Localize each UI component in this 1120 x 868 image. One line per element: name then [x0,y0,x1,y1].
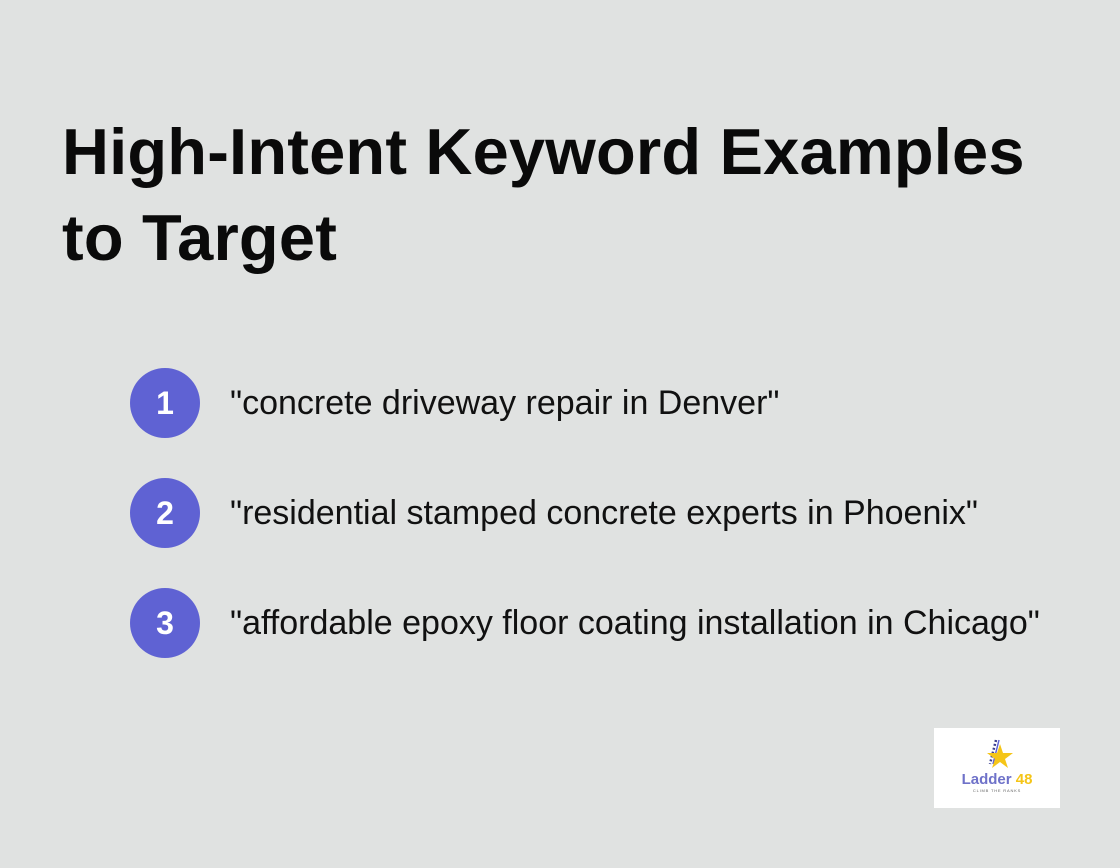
item 3 [130,588,1040,658]
logo [934,728,1060,808]
badge 2 [130,478,200,548]
logo: CLIMB THE RANKS [973,788,1021,793]
badge 3 [130,588,200,658]
title [62,115,1025,274]
title: High-Intent Keyword Examples [62,115,1025,188]
keyword 3: "affordable epoxy floor coating installation in Chicago" [230,604,1040,642]
badge 1: 1 [156,385,174,421]
keyword 2: "residential stamped concrete experts in Phoenix" [230,494,978,532]
keyword 1: "concrete driveway repair in Denver" [230,384,779,422]
badge 1 [130,368,200,438]
badge 2: 2 [156,495,174,531]
logo: Ladder 48 [962,771,1032,788]
badge 3: 3 [156,605,174,641]
item 1 [130,368,779,438]
title: to Target [62,201,337,274]
item 2 [130,478,978,548]
